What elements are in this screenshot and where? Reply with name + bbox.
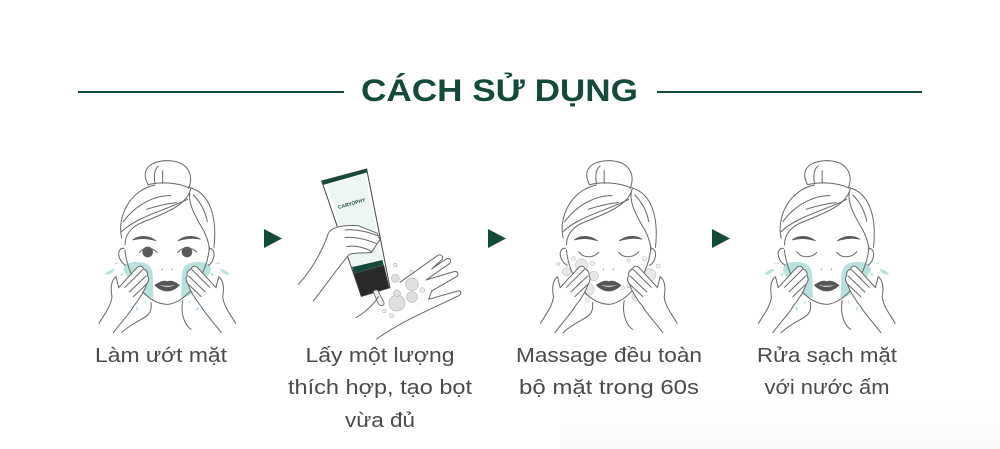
step 2 label: Lấy một lượng <box>306 344 454 367</box>
step 3: massage: bộ mặt trong 60s <box>519 376 699 399</box>
step 2: foam: thích hợp, tạo bọt <box>288 376 472 399</box>
step 3 label: Massage đều toàn <box>516 344 702 367</box>
step 4: rinse <box>757 161 897 399</box>
step 4 label: Rửa sạch mặt <box>757 344 897 367</box>
open hand <box>356 255 461 339</box>
icon: tube and hand: CARYOPHY <box>338 197 367 211</box>
icon: face with water <box>99 161 236 333</box>
step 2: foam <box>288 169 472 432</box>
bubbles <box>383 263 425 318</box>
arrow 2 <box>488 229 506 248</box>
step 1: wet face <box>95 161 236 367</box>
title with rules: CÁCH SỬ DỤNG <box>361 72 638 108</box>
icon: tube and hand <box>298 169 461 339</box>
step 4: rinse: với nước ấm <box>764 376 890 399</box>
icon: face rinsing <box>758 161 895 333</box>
holding hand <box>298 226 380 301</box>
arrow 1 <box>264 229 282 248</box>
step 1 label: Làm ướt mặt <box>95 344 227 367</box>
step 3: massage <box>516 161 702 399</box>
tube <box>322 169 390 296</box>
faint background shade <box>560 405 1000 449</box>
step 2: foam: vừa đủ <box>345 409 415 432</box>
arrow 3 <box>712 229 730 248</box>
icon: face with bubbles <box>540 161 677 333</box>
